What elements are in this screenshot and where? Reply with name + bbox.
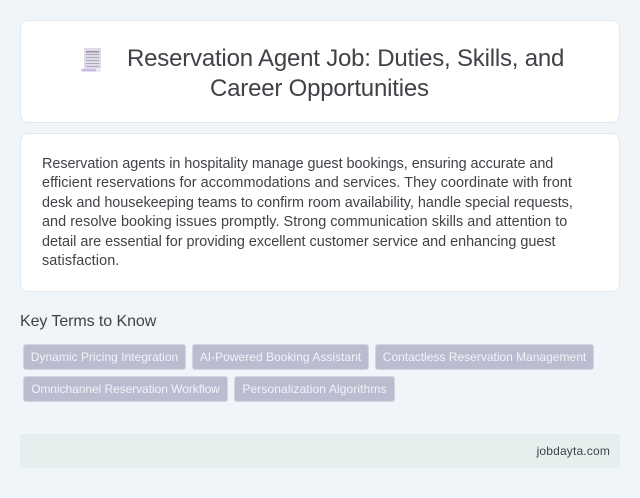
- tag: [192, 344, 369, 370]
- description text: desk and housekeeping teams to confirm room availability, handle special requests,: [42, 195, 573, 211]
- icon: reservation scroll: [81, 48, 101, 72]
- tag: [23, 344, 186, 370]
- tag: AI-Powered Booking Assistant: [200, 350, 361, 364]
- tag: [23, 376, 228, 402]
- footer site name: jobdayta.com: [537, 444, 610, 458]
- tag: Personalization Algorithms: [242, 382, 387, 396]
- title: Career Opportunities: [210, 75, 429, 102]
- tag: [375, 344, 594, 370]
- footer bar: [20, 434, 620, 468]
- description text: Reservation agents in hospitality manage guest bookings, ensuring accurate and: [42, 156, 553, 172]
- description text: efficient reservations for accommodations and services. They coordinate with front: [42, 175, 572, 191]
- tag: Omnichannel Reservation Workflow: [31, 382, 220, 396]
- title: Reservation Agent Job: Duties, Skills, and: [127, 45, 564, 72]
- tag: Dynamic Pricing Integration: [31, 350, 178, 364]
- heading: key terms: Key Terms to Know: [20, 313, 156, 330]
- key terms tags: [23, 344, 594, 402]
- description text: satisfaction.: [42, 253, 119, 269]
- tag: [234, 376, 395, 402]
- description text: [42, 156, 573, 269]
- header panel: [20, 20, 620, 123]
- description text: detail are essential for providing excellent customer service and enhancing guest: [42, 234, 556, 250]
- tag: Contactless Reservation Management: [383, 350, 586, 364]
- description panel: [20, 133, 620, 292]
- description text: and resolve booking issues promptly. Strong communication skills and attention to: [42, 214, 567, 230]
- title: [127, 45, 564, 102]
